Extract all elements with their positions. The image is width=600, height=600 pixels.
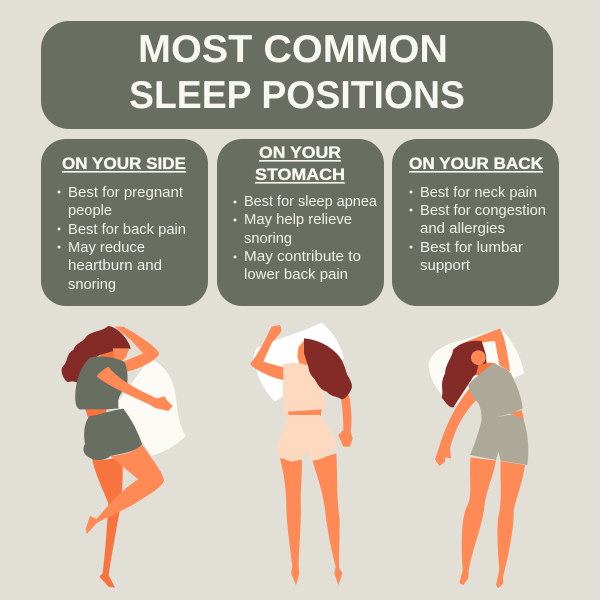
bullet list: side: heartburn and: [68, 257, 162, 274]
bullet list: back: Best for neck pain: [420, 184, 537, 201]
panel: on your side: [41, 139, 208, 306]
bullet list: side: people: [68, 202, 112, 219]
bullet list: stomach: [234, 193, 378, 283]
bullet list: stomach: snoring: [244, 230, 292, 247]
bullet list: side: Best for pregnant: [68, 184, 184, 201]
heading: on your stomach: STOMACH: [255, 166, 345, 184]
heading: on your side: ON YOUR SIDE: [62, 155, 186, 173]
illustration: woman sleeping on stomach: [251, 323, 353, 585]
panel: on your stomach: [217, 139, 384, 306]
bullet list: side: Best for back pain: [68, 221, 186, 238]
title banner: [41, 21, 553, 129]
heading: on your back: ON YOUR BACK: [409, 155, 543, 173]
bullet list: back: and allergies: [420, 220, 505, 237]
bullet list: side: May reduce: [68, 239, 145, 256]
title text: SLEEP POSITIONS: [129, 74, 465, 117]
bullet list: stomach: May help relieve: [244, 211, 352, 228]
bullet list: back: Best for congestion: [420, 202, 546, 219]
panel: on your back: [392, 139, 559, 306]
title text: [129, 28, 465, 117]
illustration: woman sleeping on back: [428, 328, 528, 588]
bullet list: side: snoring: [68, 276, 116, 293]
bullet list: side: [58, 184, 186, 293]
bullet list: stomach: lower back pain: [244, 266, 348, 283]
bullet list: stomach: May contribute to: [244, 248, 361, 265]
bullet list: back: support: [420, 257, 471, 274]
bullet list: back: Best for lumbar: [420, 239, 523, 256]
bullet list: back: [410, 184, 546, 274]
title text: MOST COMMON: [138, 28, 448, 71]
heading: on your stomach: ON YOUR: [259, 144, 341, 162]
heading: on your stomach: [255, 144, 345, 184]
illustration: woman sleeping on side: [62, 326, 186, 588]
bullet list: stomach: Best for sleep apnea: [244, 193, 378, 210]
